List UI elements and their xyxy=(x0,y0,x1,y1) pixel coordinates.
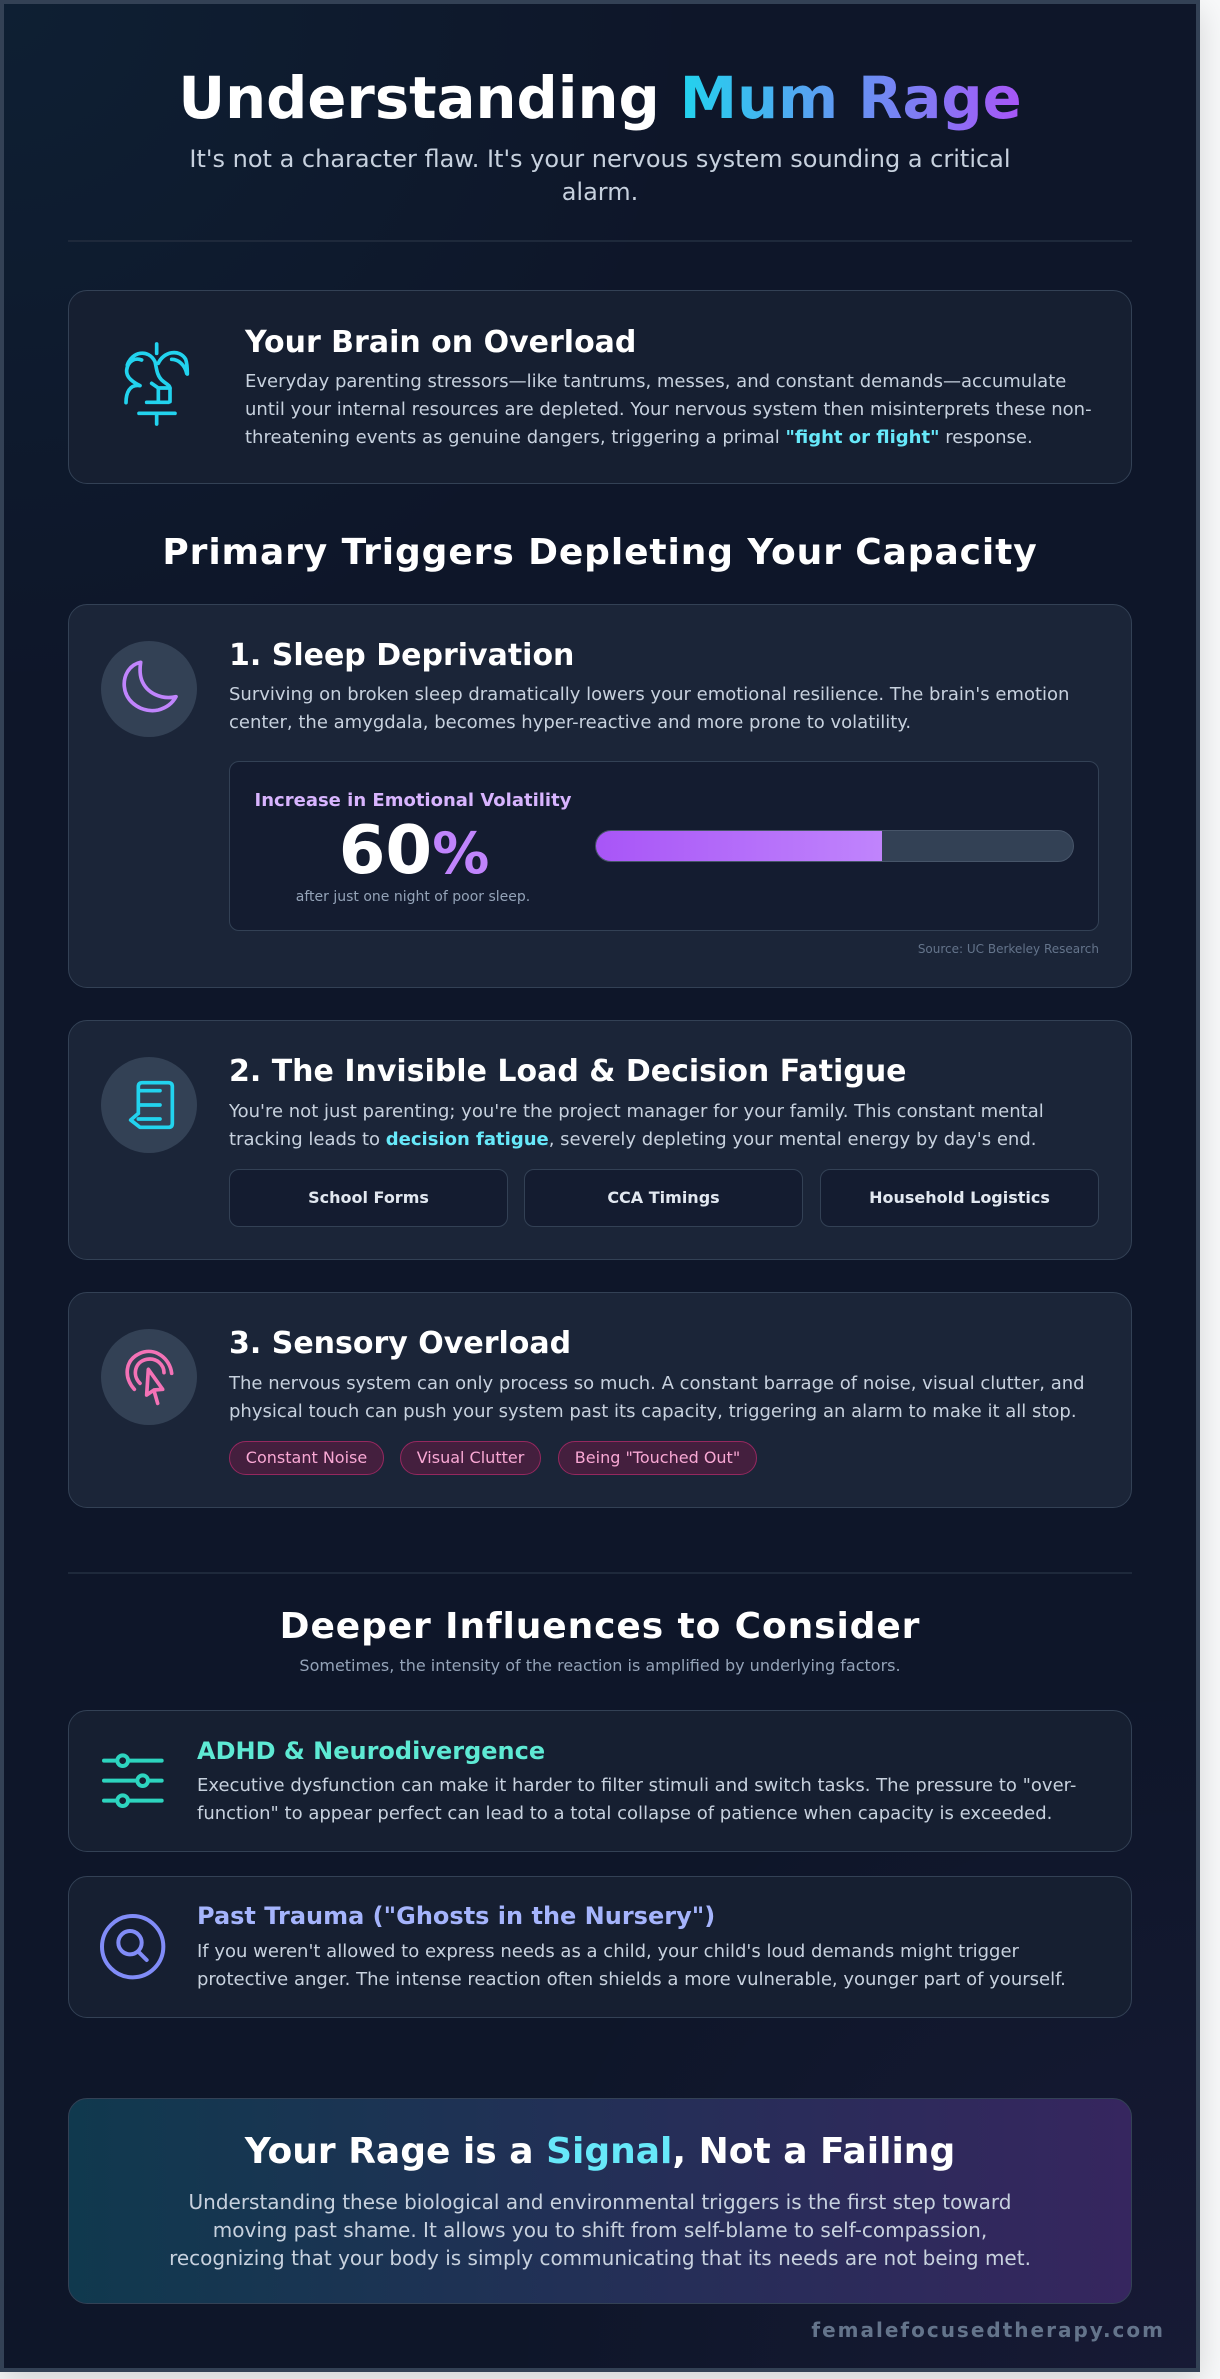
tag: touched out: Being "Touched Out" xyxy=(575,1448,740,1467)
callout heading: Your Rage is a Signal, Not a Failing xyxy=(245,2131,955,2172)
chip: cca timings: CCA Timings xyxy=(607,1188,720,1207)
callout text: recognizing that your body is simply communicating that its needs are not being met. xyxy=(169,2246,1031,2270)
heading: Your Brain on Overload xyxy=(245,325,636,360)
text block xyxy=(228,1373,1085,1422)
text block xyxy=(229,1101,1044,1150)
text block: You're not just parenting; you're the project manager for your family. This constant mental xyxy=(229,1101,1044,1122)
icon: document list xyxy=(101,1057,197,1153)
heading: 3. Sensory Overload xyxy=(229,1326,571,1361)
chip: household logistics xyxy=(820,1169,1099,1227)
text block: function" to appear perfect can lead to a total collapse of patience when capacity is exceeded. xyxy=(197,1803,1052,1824)
tag: visual clutter: Visual Clutter xyxy=(417,1448,524,1467)
heading: Past Trauma ("Ghosts in the Nursery") xyxy=(197,1902,715,1930)
icon: pointer with waves xyxy=(101,1329,197,1425)
text block: until your internal resources are depleted. Your nervous system then misinterprets these non- xyxy=(245,399,1092,420)
source note: Source: UC Berkeley Research xyxy=(918,942,1099,956)
panel: past trauma xyxy=(68,1876,1132,2018)
text block: threatening events as genuine dangers, triggering a primal "fight or flight" response. xyxy=(245,427,1033,448)
subtitle: It's not a character flaw. It's your nervous system sounding a critical xyxy=(189,145,1011,173)
text block: tracking leads to decision fatigue, severely depleting your mental energy by day's end. xyxy=(229,1129,1036,1150)
stat panel: emotional volatility xyxy=(229,761,1099,931)
panel: sensory overload xyxy=(68,1292,1132,1508)
heading: primary triggers: Primary Triggers Depleting Your Capacity xyxy=(162,532,1038,573)
stat caption: after just one night of poor sleep. xyxy=(296,889,530,905)
footer brand: femalefocusedtherapy.com xyxy=(811,2318,1165,2342)
text block xyxy=(197,1941,1066,1990)
subtitle: alarm. xyxy=(562,178,638,206)
text block: Executive dysfunction can make it harder to filter stimuli and switch tasks. The pressure to "over- xyxy=(197,1775,1076,1796)
callout: rage is a signal xyxy=(68,2098,1132,2304)
callout text: Understanding these biological and environmental triggers is the first step toward xyxy=(188,2190,1012,2214)
callout text: moving past shame. It allows you to shift from self-blame to self-compassion, xyxy=(213,2218,987,2242)
text block xyxy=(245,371,1092,448)
chip: school forms xyxy=(229,1169,508,1227)
tag: constant noise: Constant Noise xyxy=(246,1448,367,1467)
icon: sliders xyxy=(102,1753,164,1808)
panel: sleep deprivation xyxy=(68,604,1132,988)
text block: The nervous system can only process so much. A constant barrage of noise, visual clutter, and xyxy=(229,1373,1085,1394)
text block: If you weren't allowed to express needs as a child, your child's loud demands might trigger xyxy=(197,1941,1019,1962)
tag: constant noise xyxy=(229,1441,384,1475)
text block: protective anger. The intense reaction often shields a more vulnerable, younger part of yourself. xyxy=(197,1969,1066,1990)
subheading: Sometimes, the intensity of the reaction is amplified by underlying factors. xyxy=(299,1656,901,1675)
text block xyxy=(197,1775,1076,1824)
heading: deeper influences: Deeper Influences to Consider xyxy=(280,1606,920,1647)
stat value: 60% xyxy=(339,811,489,889)
tag: visual clutter xyxy=(400,1441,541,1475)
text block xyxy=(229,684,1069,733)
icon: brain xyxy=(124,342,190,426)
title: Understanding Mum Rage xyxy=(178,65,1022,132)
callout text xyxy=(169,2190,1031,2270)
chip: school forms: School Forms xyxy=(308,1188,429,1207)
icon: magnifier in circle xyxy=(100,1914,166,1980)
heading: 2. The Invisible Load & Decision Fatigue xyxy=(229,1054,907,1089)
text block: Surviving on broken sleep dramatically lowers your emotional resilience. The brain's emotion xyxy=(229,684,1069,705)
progress bar xyxy=(595,830,1074,862)
text block: Everyday parenting stressors—like tantrums, messes, and constant demands—accumulate xyxy=(245,371,1066,392)
tag: touched out xyxy=(558,1441,757,1475)
chip: household logistics: Household Logistics xyxy=(869,1188,1050,1207)
panel: brain on overload xyxy=(68,290,1132,484)
panel: adhd xyxy=(68,1710,1132,1852)
panel: invisible load xyxy=(68,1020,1132,1260)
heading: ADHD & Neurodivergence xyxy=(197,1737,545,1765)
stat label: Increase in Emotional Volatility xyxy=(255,790,571,811)
icon: moon xyxy=(101,641,197,737)
text block: physical touch can push your system past its capacity, triggering an alarm to make it all stop. xyxy=(229,1401,1077,1422)
heading: 1. Sleep Deprivation xyxy=(229,638,574,673)
subtitle xyxy=(189,145,1011,206)
chip: cca timings xyxy=(524,1169,803,1227)
text block: center, the amygdala, becomes hyper-reactive and more prone to volatility. xyxy=(229,712,911,733)
